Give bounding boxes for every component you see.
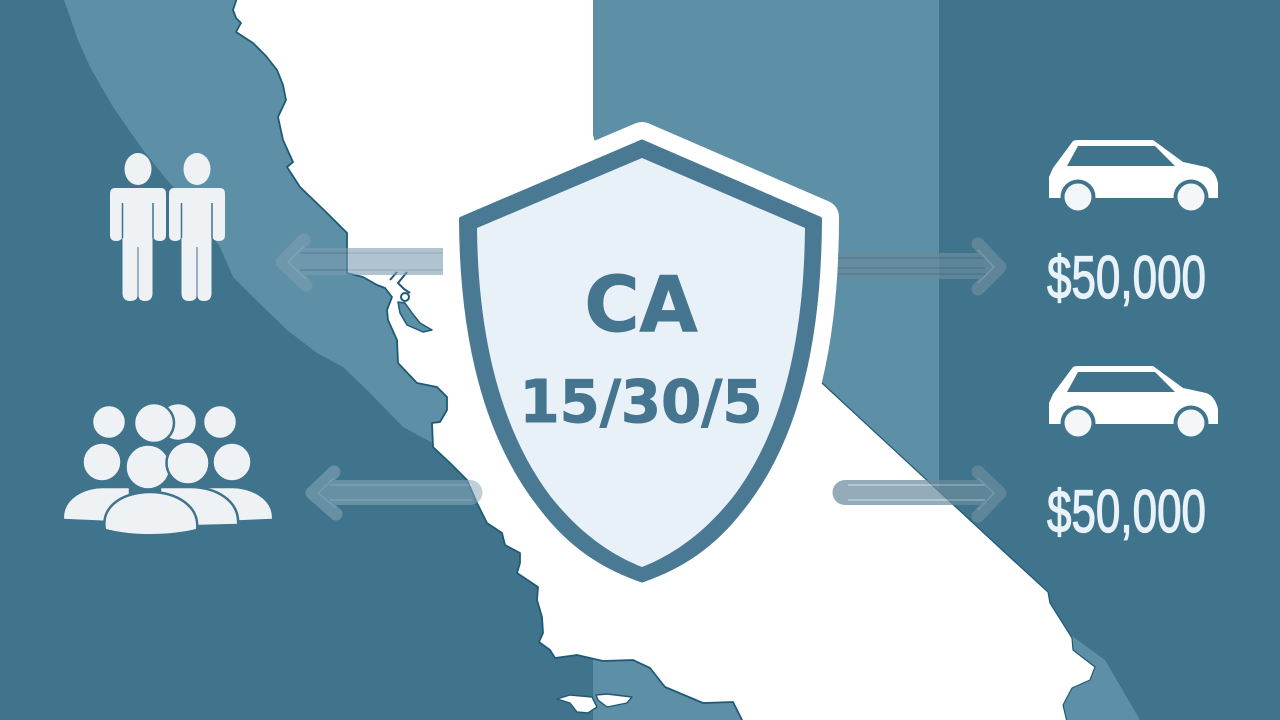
arrow: shield to first vehicle: [838, 244, 1000, 289]
shield: [459, 139, 822, 583]
person two: [169, 153, 225, 301]
shield face: [477, 158, 805, 567]
state label: CA: [584, 261, 698, 350]
coastal band: lower right sliver: [1060, 636, 1140, 720]
icon: first car: [1049, 140, 1218, 216]
icon: second car: [1049, 366, 1218, 442]
California land mass: [233, 0, 1095, 720]
arrow: shield to one person: [282, 240, 443, 285]
icon: group of people: [63, 403, 273, 535]
shield border: [462, 142, 820, 580]
central vertical band: [593, 0, 939, 720]
person one: [110, 153, 166, 301]
arrow: shield to second vehicle: [832, 472, 1000, 516]
coverage limits: 15/30/5: [520, 367, 762, 436]
arrow: shield to group of people: [312, 472, 482, 514]
Channel Islands: [557, 694, 632, 713]
shield halo: [459, 139, 822, 583]
icon: two people: [110, 153, 225, 301]
second property damage amount: $50,000: [1047, 478, 1206, 545]
coastal band: left: [64, 0, 560, 447]
first property damage amount: $50,000: [1047, 244, 1206, 311]
land fill: [233, 0, 1095, 720]
west coastline: [233, 0, 743, 720]
San Francisco Bay: [390, 272, 432, 332]
southeast border: [822, 383, 1095, 720]
